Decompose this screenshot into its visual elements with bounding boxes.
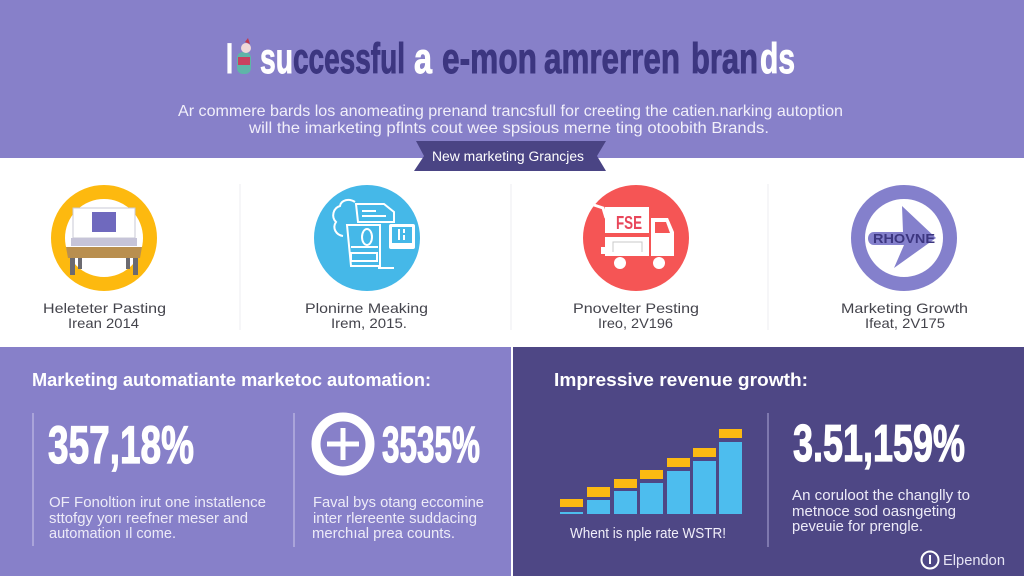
label: feature one: Heleteter Pasting [43, 300, 166, 316]
ribbon: section label [414, 141, 606, 171]
icon: delivery truck [583, 185, 689, 291]
title: amrerren [544, 35, 680, 83]
title: e-mon [442, 35, 537, 83]
title: I [226, 35, 233, 83]
subtitle: will the imarketing pflnts cout wee spsious merne ting otoobith Brands. [248, 120, 769, 137]
label: feature two [305, 300, 428, 331]
text block: revenue description: metnoce sod oasngeting [792, 504, 956, 520]
heading: Impressive revenue growth: [554, 369, 808, 390]
title: ds [760, 35, 795, 83]
subtitle: Ar commere bards los anomeating prenand trancsfull for creeting the catien.narking autoption [178, 103, 843, 120]
stat: 3535%: 3535% [382, 416, 480, 473]
text block: second stat description: inter rlereente suddacing [313, 511, 477, 527]
subtitle [178, 103, 843, 137]
logo: Elpendon [943, 553, 1005, 569]
label: feature three: Pnovelter Pesting [573, 300, 699, 316]
label: feature one: Irean 2014 [68, 315, 139, 331]
label: feature two: Irem, 2015. [331, 315, 407, 331]
chart caption: Whent is nple rate WSTR! [570, 526, 726, 542]
label: feature four: Ifeat, 2V175 [865, 315, 945, 331]
text block: first stat description: sttofgy yorı reefner meser and [49, 511, 248, 527]
panel: revenue growth [513, 347, 1024, 576]
text block: first stat description [49, 495, 266, 542]
icon: gear with plus [316, 417, 370, 471]
panel: marketing automation [0, 347, 511, 576]
panel: four feature icons [43, 184, 968, 331]
text block: second stat description: merchıal prea counts. [312, 526, 455, 542]
icon: laptop on table [58, 192, 150, 284]
text block: first stat description: OF Fonoltion irut one instatlence [49, 495, 266, 511]
label: feature two: Plonirne Meaking [305, 300, 428, 316]
label: feature four [841, 300, 968, 331]
label: feature one [43, 300, 166, 331]
logo [922, 552, 1005, 569]
icon: connected devices [314, 185, 420, 291]
text block: second stat description [312, 495, 484, 542]
icon: delivery truck: FSE [616, 213, 642, 233]
text block: revenue description [792, 488, 970, 535]
icon: growth arrow [858, 192, 950, 284]
ribbon: section label: New marketing Grancjes [432, 149, 584, 164]
text block: second stat description: Faval bys otang eccomine [313, 495, 484, 511]
title: a [414, 35, 433, 83]
icon: growth arrow: RHOVNE [873, 231, 935, 246]
label: feature four: Marketing Growth [841, 300, 968, 316]
label: feature three [573, 300, 699, 331]
title: bran [691, 35, 758, 83]
stat: 357,18%: 357,18% [48, 416, 194, 475]
text block: first stat description: automation ıl come. [49, 526, 176, 542]
header panel [0, 0, 1024, 158]
title: su [260, 35, 293, 83]
text block: revenue description: peveuie for prengle. [792, 519, 923, 535]
title: ccessful [293, 35, 405, 83]
title [226, 35, 795, 83]
heading: Marketing automatiante marketoc automation: [32, 369, 431, 390]
bar chart [560, 429, 742, 514]
icon: title figurine [237, 38, 251, 74]
label: feature three: Ireo, 2V196 [598, 315, 673, 331]
text block: revenue description: An coruloot the changlly to [792, 488, 970, 504]
